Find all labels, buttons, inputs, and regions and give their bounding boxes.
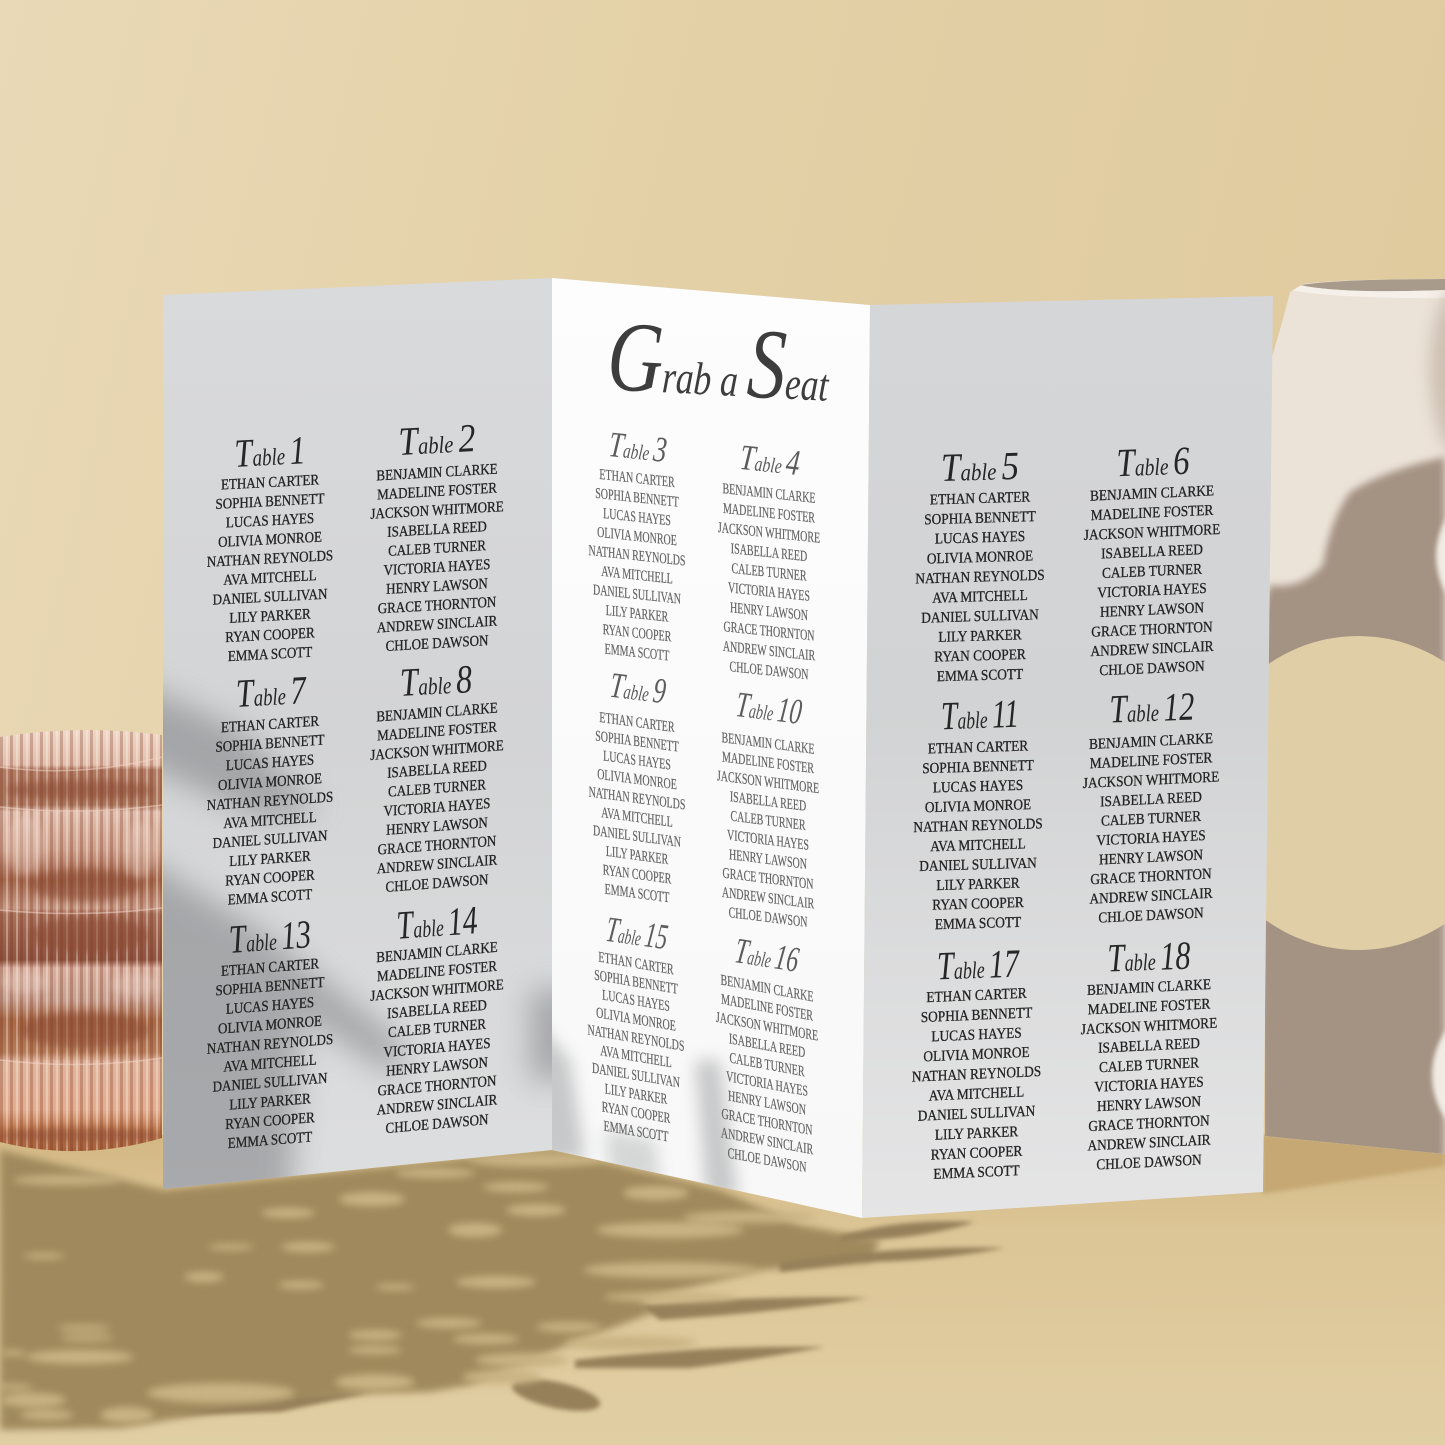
table 15 bbox=[588, 909, 684, 1148]
names: ETHAN CARTER bbox=[599, 466, 675, 491]
names bbox=[716, 971, 818, 1178]
names: DANIEL SULLIVAN bbox=[919, 855, 1037, 875]
names: CALEB TURNER bbox=[388, 537, 487, 560]
names: ISABELLA REED bbox=[1101, 541, 1203, 563]
names: ETHAN CARTER bbox=[221, 472, 320, 494]
names: EMMA SCOTT bbox=[937, 666, 1023, 686]
table 11 bbox=[913, 691, 1043, 934]
names: ISABELLA REED bbox=[387, 518, 487, 541]
table 13 bbox=[207, 911, 333, 1154]
names: ETHAN CARTER bbox=[599, 709, 675, 736]
names: LILY PARKER bbox=[605, 1080, 668, 1108]
names: OLIVIA MONROE bbox=[218, 529, 322, 551]
names: VICTORIA HAYES bbox=[726, 1068, 808, 1100]
panel: left bbox=[163, 278, 552, 1189]
names: CHLOE DAWSON bbox=[729, 904, 807, 931]
names bbox=[207, 954, 333, 1154]
names: CHLOE DAWSON bbox=[386, 871, 488, 896]
heading: Table 12 bbox=[1109, 684, 1195, 731]
names: ISABELLA REED bbox=[387, 997, 487, 1023]
names: HENRY LAWSON bbox=[1099, 847, 1203, 869]
names: HENRY LAWSON bbox=[386, 575, 488, 598]
names: DANIEL SULLIVAN bbox=[593, 581, 681, 607]
names bbox=[717, 729, 819, 932]
names: HENRY LAWSON bbox=[386, 1054, 488, 1080]
names: CALEB TURNER bbox=[730, 808, 806, 834]
table 3 bbox=[589, 424, 685, 666]
names: DANIEL SULLIVAN bbox=[593, 822, 681, 850]
names: DANIEL SULLIVAN bbox=[213, 586, 327, 609]
left panel shadows bbox=[163, 680, 552, 1189]
names: NATHAN REYNOLDS bbox=[913, 816, 1043, 836]
names: BENJAMIN CLARKE bbox=[1087, 976, 1211, 999]
names: OLIVIA MONROE bbox=[218, 1013, 322, 1038]
names: LILY PARKER bbox=[229, 1090, 311, 1114]
names: ISABELLA REED bbox=[730, 788, 806, 814]
names: JACKSON WHITMORE bbox=[370, 737, 504, 764]
names: JACKSON WHITMORE bbox=[717, 767, 819, 797]
names: BENJAMIN CLARKE bbox=[722, 729, 815, 757]
names: NATHAN REYNOLDS bbox=[912, 1063, 1041, 1086]
table 9 bbox=[589, 665, 685, 908]
names: GRACE THORNTON bbox=[378, 1073, 496, 1100]
middle panel shadows bbox=[552, 1028, 744, 1192]
names: JACKSON WHITMORE bbox=[1083, 769, 1219, 792]
names: CALEB TURNER bbox=[1102, 561, 1203, 582]
names bbox=[370, 460, 504, 656]
names: CALEB TURNER bbox=[388, 776, 487, 801]
names: ETHAN CARTER bbox=[221, 955, 320, 980]
heading: Table 9 bbox=[608, 665, 668, 711]
names: ANDREW SINCLAIR bbox=[722, 884, 814, 912]
names: MADELINE FOSTER bbox=[377, 480, 497, 504]
names: CALEB TURNER bbox=[729, 1050, 805, 1080]
names: LILY PARKER bbox=[229, 848, 311, 870]
names: CALEB TURNER bbox=[388, 1016, 487, 1042]
names: GRACE THORNTON bbox=[723, 618, 815, 644]
title: Grab a Seat bbox=[605, 300, 833, 423]
names: EMMA SCOTT bbox=[228, 644, 313, 665]
names bbox=[1081, 976, 1217, 1175]
names: JACKSON WHITMORE bbox=[370, 498, 504, 523]
table 7 bbox=[207, 667, 333, 910]
names: LUCAS HAYES bbox=[602, 987, 670, 1015]
names: AVA MITCHELL bbox=[929, 1084, 1024, 1105]
names: GRACE THORNTON bbox=[378, 833, 496, 859]
names bbox=[1084, 482, 1220, 680]
names: ISABELLA REED bbox=[729, 1030, 805, 1061]
names: HENRY LAWSON bbox=[386, 814, 488, 839]
names: MADELINE FOSTER bbox=[722, 749, 814, 777]
names: GRACE THORNTON bbox=[1091, 619, 1213, 641]
names: OLIVIA MONROE bbox=[596, 1004, 676, 1034]
names: OLIVIA MONROE bbox=[597, 524, 677, 549]
shadow mass bbox=[0, 1150, 880, 1430]
names: RYAN COOPER bbox=[932, 894, 1024, 914]
names: GRACE THORNTON bbox=[722, 1105, 812, 1139]
heading: Table 5 bbox=[940, 443, 1020, 490]
glass candle holder bbox=[0, 720, 165, 1165]
names: LUCAS HAYES bbox=[226, 994, 314, 1018]
names: GRACE THORNTON bbox=[723, 865, 813, 893]
floor bbox=[0, 1135, 1445, 1445]
names: LILY PARKER bbox=[938, 627, 1022, 646]
names: VICTORIA HAYES bbox=[384, 556, 490, 579]
vase upper shade bbox=[1430, 285, 1445, 455]
names: NATHAN REYNOLDS bbox=[589, 784, 685, 813]
names: HENRY LAWSON bbox=[728, 1088, 806, 1118]
names: RYAN COOPER bbox=[931, 1143, 1023, 1164]
names: VICTORIA HAYES bbox=[384, 795, 490, 820]
vase hole bbox=[1266, 636, 1445, 950]
glass contours bbox=[0, 757, 162, 1065]
table 14 bbox=[370, 897, 504, 1139]
heading: Table 17 bbox=[936, 941, 1021, 988]
names: SOPHIA BENNETT bbox=[595, 727, 679, 755]
names: SOPHIA BENNETT bbox=[215, 732, 325, 756]
table 5 bbox=[915, 443, 1045, 686]
names: OLIVIA MONROE bbox=[923, 1044, 1030, 1066]
names: VICTORIA HAYES bbox=[384, 1035, 490, 1061]
names: NATHAN REYNOLDS bbox=[207, 789, 333, 814]
names: GRACE THORNTON bbox=[378, 594, 496, 618]
names: RYAN COOPER bbox=[225, 867, 315, 890]
names: AVA MITCHELL bbox=[223, 809, 317, 832]
names: MADELINE FOSTER bbox=[1088, 996, 1211, 1019]
heading: Table 2 bbox=[397, 415, 477, 464]
names: RYAN COOPER bbox=[225, 625, 315, 646]
heading: Table 7 bbox=[235, 667, 309, 716]
names: ANDREW SINCLAIR bbox=[1090, 638, 1214, 660]
table 17 bbox=[912, 941, 1041, 1184]
names: NATHAN REYNOLDS bbox=[915, 567, 1045, 588]
names bbox=[718, 480, 820, 684]
names bbox=[370, 699, 504, 897]
names: SOPHIA BENNETT bbox=[924, 508, 1036, 529]
table 16 bbox=[716, 930, 818, 1178]
names: HENRY LAWSON bbox=[729, 846, 807, 872]
names: ISABELLA REED bbox=[731, 540, 807, 565]
names: OLIVIA MONROE bbox=[925, 796, 1031, 817]
names: ANDREW SINCLAIR bbox=[723, 638, 816, 664]
heading: Table 14 bbox=[395, 897, 479, 948]
shadow lit spots bbox=[0, 1153, 817, 1423]
names: CHLOE DAWSON bbox=[386, 1111, 488, 1137]
table 18 bbox=[1081, 933, 1217, 1175]
names: ETHAN CARTER bbox=[221, 713, 320, 737]
names: BENJAMIN CLARKE bbox=[1090, 483, 1214, 505]
names: BENJAMIN CLARKE bbox=[376, 700, 498, 726]
names: EMMA SCOTT bbox=[935, 914, 1021, 934]
names: DANIEL SULLIVAN bbox=[213, 1070, 327, 1096]
names: LILY PARKER bbox=[606, 843, 669, 868]
names: RYAN COOPER bbox=[225, 1109, 315, 1133]
names: ANDREW SINCLAIR bbox=[721, 1124, 813, 1158]
names: MADELINE FOSTER bbox=[1091, 502, 1214, 524]
table 8 bbox=[370, 656, 504, 897]
names: ETHAN CARTER bbox=[930, 489, 1031, 509]
names: LUCAS HAYES bbox=[226, 752, 314, 775]
names: LILY PARKER bbox=[606, 602, 669, 625]
names: BENJAMIN CLARKE bbox=[376, 939, 498, 967]
vase lit crescents bbox=[1433, 518, 1445, 594]
names bbox=[589, 708, 685, 908]
heading: Table 8 bbox=[399, 656, 473, 705]
names: SOPHIA BENNETT bbox=[921, 1005, 1033, 1026]
floor leaf shadow bbox=[0, 1150, 1005, 1430]
names bbox=[1083, 730, 1219, 928]
heading: Table 18 bbox=[1107, 933, 1191, 980]
seating chart card bbox=[130, 278, 1273, 1220]
names: VICTORIA HAYES bbox=[728, 579, 810, 604]
heading: Table 13 bbox=[227, 911, 312, 962]
names: EMMA SCOTT bbox=[605, 641, 670, 664]
names bbox=[588, 947, 684, 1148]
names: OLIVIA MONROE bbox=[927, 548, 1033, 568]
names: NATHAN REYNOLDS bbox=[588, 1022, 684, 1054]
names: NATHAN REYNOLDS bbox=[589, 542, 685, 569]
names: LUCAS HAYES bbox=[603, 505, 671, 529]
names: ANDREW SINCLAIR bbox=[1089, 885, 1213, 908]
names: MADELINE FOSTER bbox=[1090, 750, 1213, 773]
names: ETHAN CARTER bbox=[598, 949, 674, 978]
table 10 bbox=[717, 684, 819, 932]
names: MADELINE FOSTER bbox=[723, 500, 815, 526]
heading: Table 16 bbox=[732, 930, 802, 980]
names: EMMA SCOTT bbox=[604, 1118, 668, 1145]
names bbox=[912, 985, 1041, 1184]
table 12 bbox=[1083, 684, 1219, 928]
names: BENJAMIN CLARKE bbox=[722, 480, 816, 506]
names: SOPHIA BENNETT bbox=[594, 967, 678, 997]
names: OLIVIA MONROE bbox=[218, 770, 322, 794]
names: CALEB TURNER bbox=[731, 560, 807, 584]
table 1 bbox=[207, 427, 333, 666]
heading: Table 3 bbox=[607, 424, 669, 470]
names: LILY PARKER bbox=[229, 606, 311, 627]
names: CHLOE DAWSON bbox=[1096, 1152, 1202, 1174]
names: RYAN COOPER bbox=[603, 861, 672, 887]
names: LILY PARKER bbox=[936, 875, 1020, 894]
names bbox=[913, 737, 1043, 934]
names: HENRY LAWSON bbox=[1100, 600, 1204, 621]
panel: right bbox=[862, 296, 1273, 1218]
names: LUCAS HAYES bbox=[935, 528, 1025, 548]
table 6 bbox=[1084, 438, 1220, 680]
names: CHLOE DAWSON bbox=[728, 1145, 806, 1176]
names: ANDREW SINCLAIR bbox=[1087, 1132, 1211, 1155]
names: HENRY LAWSON bbox=[1097, 1093, 1201, 1115]
names bbox=[207, 712, 333, 910]
names: OLIVIA MONROE bbox=[597, 766, 677, 793]
names: MADELINE FOSTER bbox=[377, 958, 498, 986]
names: CHLOE DAWSON bbox=[1098, 905, 1204, 927]
names: SOPHIA BENNETT bbox=[595, 485, 679, 510]
names: LUCAS HAYES bbox=[931, 1025, 1022, 1046]
names: EMMA SCOTT bbox=[228, 886, 313, 909]
names: AVA MITCHELL bbox=[601, 804, 673, 830]
names: VICTORIA HAYES bbox=[727, 827, 809, 853]
names: ANDREW SINCLAIR bbox=[377, 852, 498, 878]
names: JACKSON WHITMORE bbox=[718, 519, 820, 546]
names: SOPHIA BENNETT bbox=[215, 974, 325, 1000]
names: LUCAS HAYES bbox=[226, 510, 314, 532]
names: HENRY LAWSON bbox=[730, 599, 808, 624]
vase shadowed body bbox=[1260, 457, 1445, 1160]
names: JACKSON WHITMORE bbox=[1084, 521, 1220, 544]
names: AVA MITCHELL bbox=[223, 1052, 317, 1076]
names: DANIEL SULLIVAN bbox=[213, 827, 327, 852]
names: SOPHIA BENNETT bbox=[922, 757, 1034, 777]
names: EMMA SCOTT bbox=[605, 881, 669, 906]
names: JACKSON WHITMORE bbox=[370, 976, 504, 1005]
names: ISABELLA REED bbox=[387, 757, 487, 782]
names: LUCAS HAYES bbox=[603, 748, 671, 773]
names: DANIEL SULLIVAN bbox=[918, 1103, 1035, 1125]
names: CALEB TURNER bbox=[1101, 808, 1202, 830]
names: LILY PARKER bbox=[935, 1123, 1019, 1144]
names: CHLOE DAWSON bbox=[386, 632, 488, 655]
names: GRACE THORNTON bbox=[1088, 1112, 1210, 1135]
names: AVA MITCHELL bbox=[223, 567, 317, 589]
heading: Table 6 bbox=[1116, 438, 1190, 485]
vase bbox=[1265, 279, 1445, 1154]
names: BENJAMIN CLARKE bbox=[1089, 730, 1213, 753]
names: EMMA SCOTT bbox=[228, 1129, 313, 1152]
names: GRACE THORNTON bbox=[1090, 866, 1212, 888]
names: AVA MITCHELL bbox=[601, 563, 673, 587]
names: DANIEL SULLIVAN bbox=[921, 607, 1039, 627]
names: ISABELLA REED bbox=[1100, 789, 1202, 811]
names: DANIEL SULLIVAN bbox=[592, 1060, 680, 1091]
glass ribs bbox=[0, 720, 165, 1165]
names: JACKSON WHITMORE bbox=[1081, 1015, 1217, 1038]
names bbox=[915, 488, 1045, 686]
names: MADELINE FOSTER bbox=[377, 719, 498, 745]
names bbox=[589, 465, 685, 666]
names: AVA MITCHELL bbox=[600, 1042, 672, 1071]
names: NATHAN REYNOLDS bbox=[207, 547, 333, 571]
names: RYAN COOPER bbox=[934, 646, 1026, 666]
names: ISABELLA REED bbox=[1098, 1035, 1200, 1057]
names: BENJAMIN CLARKE bbox=[376, 461, 498, 485]
names: ETHAN CARTER bbox=[926, 985, 1027, 1006]
names: RYAN COOPER bbox=[603, 621, 672, 645]
names: CALEB TURNER bbox=[1099, 1055, 1200, 1076]
panel: middle bbox=[535, 278, 870, 1218]
names: VICTORIA HAYES bbox=[1096, 827, 1206, 850]
names: MADELINE FOSTER bbox=[721, 991, 813, 1024]
heading: Table 1 bbox=[233, 427, 307, 476]
heading: Table 15 bbox=[604, 909, 670, 957]
heading: Table 4 bbox=[738, 437, 802, 483]
names: VICTORIA HAYES bbox=[1094, 1074, 1204, 1096]
names: EMMA SCOTT bbox=[933, 1162, 1020, 1183]
names bbox=[370, 938, 504, 1139]
heading: Table 10 bbox=[734, 684, 804, 732]
names: AVA MITCHELL bbox=[932, 587, 1028, 607]
names: VICTORIA HAYES bbox=[1097, 580, 1207, 602]
heading: Table 11 bbox=[940, 691, 1020, 738]
glass mottling bbox=[0, 780, 165, 1142]
table 4 bbox=[718, 437, 820, 684]
glass highlights bbox=[1, 815, 159, 997]
names: AVA MITCHELL bbox=[930, 836, 1026, 855]
vase rim bbox=[1300, 279, 1445, 291]
names bbox=[207, 471, 333, 666]
names: ANDREW SINCLAIR bbox=[377, 1092, 498, 1119]
shadow fingers bbox=[170, 1221, 1005, 1417]
names: JACKSON WHITMORE bbox=[716, 1009, 818, 1044]
table 2 bbox=[370, 415, 504, 656]
names: LUCAS HAYES bbox=[933, 777, 1023, 797]
vase floor shadow bbox=[1262, 1135, 1445, 1194]
names: RYAN COOPER bbox=[602, 1099, 671, 1127]
names: CHLOE DAWSON bbox=[730, 658, 808, 683]
names: BENJAMIN CLARKE bbox=[721, 972, 814, 1005]
names: NATHAN REYNOLDS bbox=[207, 1031, 333, 1058]
names: ANDREW SINCLAIR bbox=[377, 613, 498, 637]
names: SOPHIA BENNETT bbox=[216, 490, 325, 513]
names: CHLOE DAWSON bbox=[1099, 658, 1205, 680]
names: ETHAN CARTER bbox=[928, 738, 1029, 758]
